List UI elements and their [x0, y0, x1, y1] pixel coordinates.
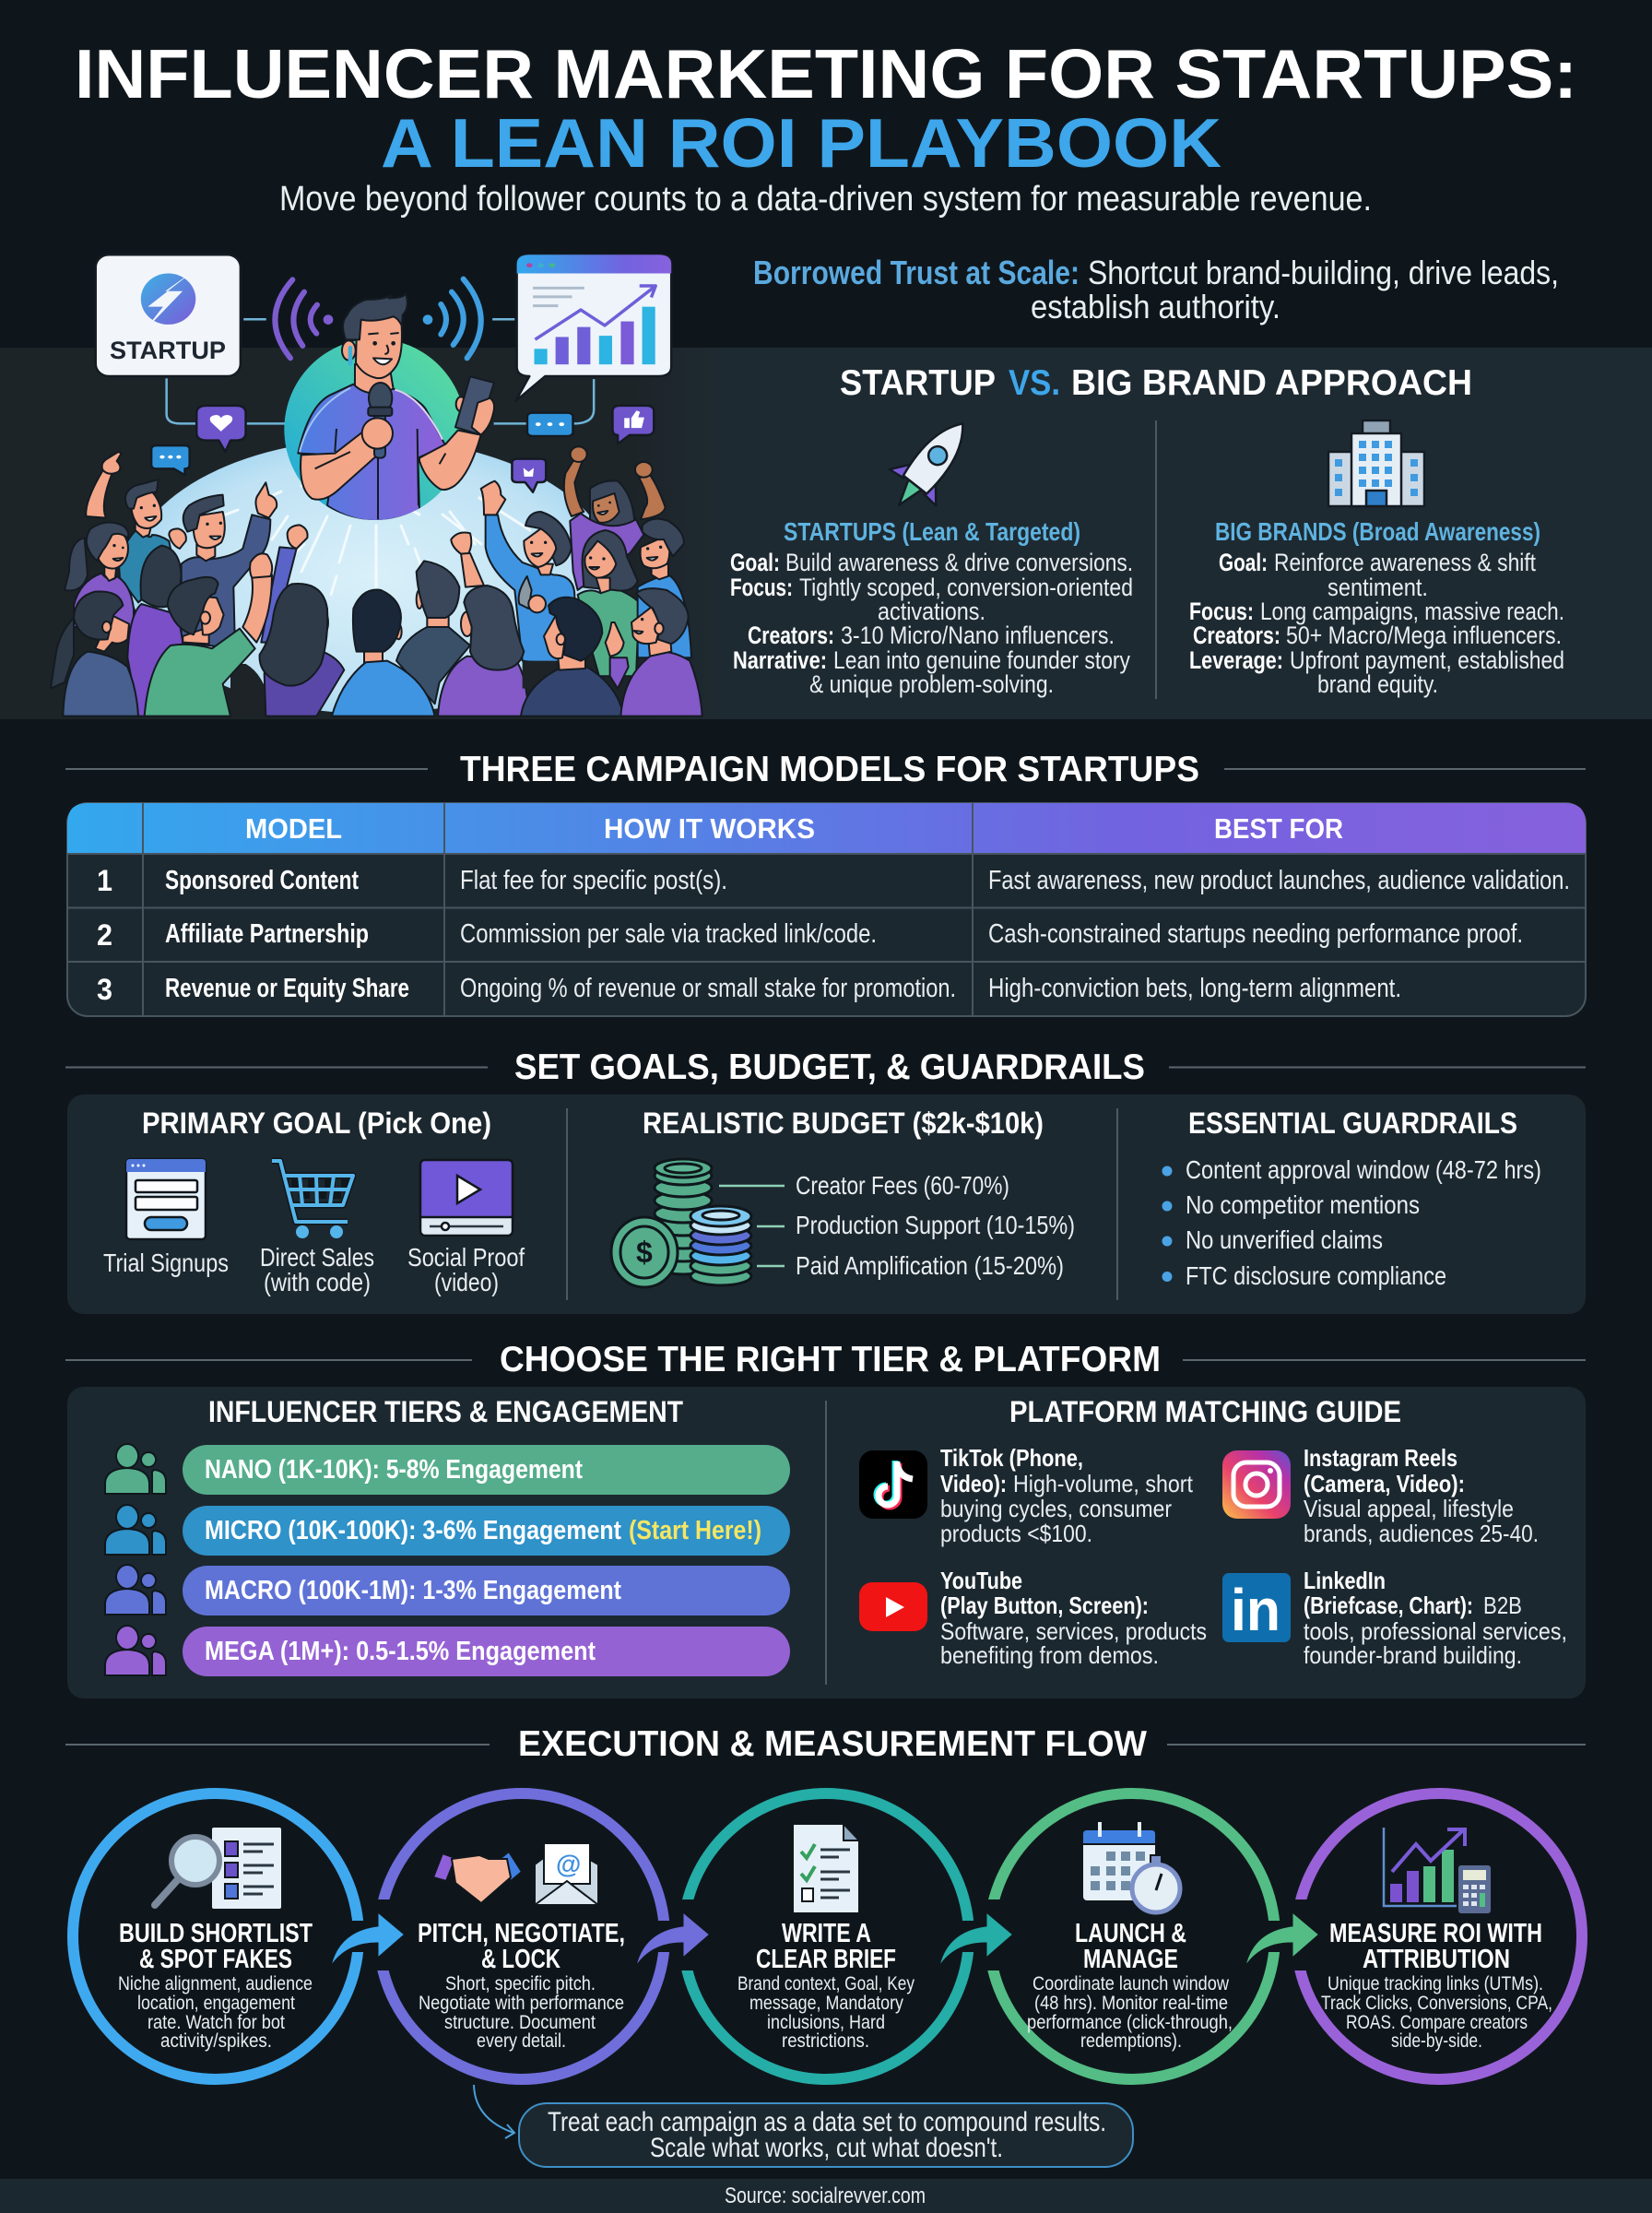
- platform: linkedin: [1222, 1567, 1567, 1669]
- table row 2: [97, 918, 1523, 952]
- table row 1: Sponsored Content: [165, 866, 359, 895]
- step 4: [1027, 1822, 1233, 2052]
- ring 2: [379, 1793, 665, 2079]
- panel: startups column: Narrative:: [733, 646, 827, 674]
- panel: startups column: STARTUPS (Lean & Targeted): [784, 517, 1080, 546]
- step 2: structure. Document: [444, 2012, 596, 2033]
- icon: shopping cart: [272, 1161, 353, 1238]
- panel: big brands column: Focus:: [1189, 598, 1254, 625]
- icon: rocket: [876, 406, 985, 523]
- influencer tiers: [105, 1395, 790, 1676]
- budget column: Production Support (10-15%): [796, 1211, 1075, 1239]
- step 1: BUILD SHORTLIST: [119, 1919, 313, 1948]
- platform: linkedin: in: [1231, 1577, 1280, 1643]
- heading: goals budget guardrails: SET GOALS, BUDGET, & GUARDRAILS: [514, 1047, 1145, 1087]
- callout: Treat each campaign as a data set to compound results.: [548, 2107, 1106, 2137]
- table row 3: Revenue or Equity Share: [165, 974, 409, 1003]
- arrow: feedback connector: [474, 2085, 514, 2138]
- table row 1: 1: [97, 864, 112, 897]
- budget column: [611, 1106, 1075, 1287]
- platform guide: [859, 1395, 1567, 1669]
- text: borrowed trust: Shortcut brand-building, drive leads,: [1088, 254, 1559, 291]
- panel: startups column: Goal:: [730, 549, 780, 576]
- band: hero and comparison background: [0, 348, 1652, 719]
- table row 2: Cash-constrained startups needing performance proof.: [988, 919, 1523, 949]
- primary goal column: PRIMARY GOAL (Pick One): [142, 1106, 491, 1140]
- platform: tiktok: High-volume, short: [1013, 1470, 1194, 1497]
- arrow 1: [329, 1911, 406, 1970]
- step 4: redemptions).: [1080, 2030, 1182, 2052]
- step 3: inclusions, Hard: [767, 2012, 885, 2033]
- spotlight dome: [128, 439, 615, 714]
- connector lines: [167, 319, 594, 423]
- panel: big brands column: brand equity.: [1317, 670, 1438, 698]
- platform: instagram: [1222, 1444, 1539, 1547]
- icon: growth chart and calculator: [1384, 1828, 1492, 1914]
- icon: magnifier and list: [155, 1827, 282, 1910]
- step 3: [738, 1824, 914, 2052]
- subtitle: Move beyond follower counts to a data-driven system for measurable revenue.: [279, 180, 1372, 219]
- budget column: Paid Amplification (15-20%): [796, 1251, 1064, 1280]
- footer source: Source: socialrevver.com: [725, 2183, 926, 2208]
- panel: big brands column: Upfront payment, established: [1290, 646, 1564, 674]
- hero illustration: STARTUP: [110, 337, 226, 364]
- step 1: rate. Watch for bot: [148, 2012, 285, 2033]
- panel: startups column: activations.: [878, 598, 985, 625]
- step 2: Short, specific pitch.: [445, 1973, 596, 1994]
- panel: big brands column: sentiment.: [1328, 574, 1428, 601]
- primary goal column: (video): [434, 1268, 499, 1296]
- tier: macro: MACRO (100K-1M): 1-3% Engagement: [205, 1576, 621, 1605]
- step 5: ATTRIBUTION: [1363, 1945, 1510, 1974]
- ring 5: [1296, 1793, 1582, 2079]
- ring 4: [989, 1793, 1275, 2079]
- heading: execution flow: EXECUTION & MEASUREMENT FLOW: [518, 1724, 1147, 1764]
- platform: instagram: Instagram Reels: [1304, 1444, 1457, 1472]
- step 4: (48 hrs). Monitor real-time: [1034, 1993, 1228, 2014]
- platform: youtube: benefiting from demos.: [940, 1641, 1159, 1669]
- panel: startups column: Creators:: [748, 621, 834, 649]
- platform: youtube: (Play Button, Screen):: [940, 1592, 1149, 1619]
- table header: [245, 812, 1343, 845]
- step 2: Negotiate with performance: [419, 1993, 624, 2014]
- icon: coin stacks: [611, 1159, 751, 1287]
- guardrails column: Content approval window (48-72 hrs): [1186, 1155, 1541, 1184]
- platform: instagram: brands, audiences 25-40.: [1304, 1520, 1539, 1547]
- step 5: side-by-side.: [1391, 2030, 1482, 2052]
- table row 2: 2: [97, 918, 112, 952]
- tier: mega: [105, 1626, 790, 1676]
- step 1: [118, 1827, 313, 2052]
- table row 3: Ongoing % of revenue or small stake for promotion.: [460, 974, 956, 1003]
- icon: signup form: [126, 1159, 206, 1239]
- panel: startups column: Focus:: [730, 574, 793, 601]
- table row 3: 3: [97, 973, 112, 1006]
- card: chart: [515, 254, 671, 401]
- panel: big brands column: Leverage:: [1189, 646, 1283, 674]
- reaction bubbles and cards: [96, 254, 671, 492]
- primary goal column: [103, 1106, 525, 1296]
- table row 1: Flat fee for specific post(s).: [460, 866, 727, 895]
- title: INFLUENCER MARKETING FOR STARTUPS:: [75, 35, 1577, 112]
- step 2: [418, 1843, 625, 2052]
- step 4: LAUNCH &: [1075, 1919, 1186, 1948]
- step 5: Unique tracking links (UTMs).: [1328, 1973, 1543, 1994]
- heading: startup vs big brand: BIG BRAND APPROACH: [1071, 363, 1472, 403]
- guardrails column: ESSENTIAL GUARDRAILS: [1188, 1106, 1517, 1140]
- panel: startups column: Build awareness & drive conversions.: [785, 549, 1133, 576]
- tier: macro: [105, 1565, 790, 1615]
- panel: startups column: Tightly scoped, conversion-oriented: [799, 574, 1133, 601]
- platform: linkedin: (Briefcase, Chart):: [1304, 1592, 1473, 1619]
- icon: handshake and envelope: @: [556, 1850, 581, 1878]
- panel: startups column: 3-10 Micro/Nano influencers.: [841, 621, 1115, 649]
- icon: checklist document: [793, 1824, 859, 1913]
- flow: execution steps: [73, 1793, 1582, 2079]
- ring 3: [683, 1793, 969, 2079]
- panel: goals, budget, guardrails: [67, 1095, 1586, 1314]
- panel: big brands column: Creators:: [1193, 621, 1280, 649]
- tier: nano: NANO (1K-10K): 5-8% Engagement: [205, 1455, 583, 1485]
- table header: MODEL: [245, 812, 342, 845]
- budget column: $: [636, 1236, 653, 1269]
- tier: micro: [105, 1505, 790, 1556]
- icon: video: [420, 1160, 513, 1236]
- tier: nano: [105, 1444, 790, 1495]
- step 4: performance (click-through,: [1027, 2012, 1233, 2033]
- step 3: Brand context, Goal, Key: [738, 1973, 914, 1994]
- step 1: activity/spikes.: [160, 2030, 272, 2052]
- table row 2: Affiliate Partnership: [165, 919, 369, 949]
- tier: micro: MICRO (10K-100K): 3-6% Engagement: [205, 1516, 621, 1545]
- budget column: Creator Fees (60-70%): [796, 1171, 1009, 1200]
- bubbles: reactions: [151, 406, 654, 492]
- panel: startups column: [730, 406, 1133, 698]
- platform: tiktok: products <$100.: [940, 1520, 1092, 1547]
- platform: linkedin: tools, professional services,: [1304, 1617, 1567, 1645]
- panel: big brands column: Goal:: [1219, 549, 1268, 576]
- panel: tiers and platforms: [67, 1387, 1586, 1698]
- band: footer background: [0, 2179, 1652, 2213]
- platform: tiktok: TikTok (Phone,: [940, 1444, 1083, 1472]
- tier: mega: MEGA (1M+): 0.5-1.5% Engagement: [205, 1637, 596, 1666]
- callout: [519, 2103, 1133, 2167]
- heading: startup vs big brand: [840, 363, 1472, 403]
- platform: youtube: YouTube: [940, 1567, 1022, 1594]
- primary goal column: Direct Sales: [260, 1243, 374, 1272]
- tier: micro: (Start Here!): [629, 1516, 761, 1545]
- icon: handshake and envelope: [433, 1843, 598, 1905]
- platform: linkedin: LinkedIn: [1304, 1567, 1386, 1594]
- primary goal column: (with code): [264, 1268, 371, 1296]
- text: borrowed trust: establish authority.: [1031, 288, 1280, 325]
- panel: big brands column: [1189, 420, 1564, 698]
- step 3: WRITE A: [782, 1919, 871, 1948]
- platform: linkedin: founder-brand building.: [1304, 1641, 1522, 1669]
- step 3: restrictions.: [782, 2030, 869, 2052]
- step 4: MANAGE: [1083, 1945, 1178, 1974]
- audience right: [332, 446, 702, 716]
- budget column: REALISTIC BUDGET ($2k-$10k): [643, 1106, 1044, 1140]
- platform: linkedin: B2B: [1483, 1592, 1522, 1619]
- title: [75, 35, 1577, 182]
- platform guide: PLATFORM MATCHING GUIDE: [1009, 1395, 1401, 1428]
- primary goal column: Trial Signups: [103, 1249, 229, 1277]
- table header: BEST FOR: [1214, 812, 1343, 845]
- text: borrowed trust: Borrowed Trust at Scale:: [753, 254, 1080, 291]
- platform: tiktok: buying cycles, consumer: [940, 1495, 1172, 1522]
- platform: youtube: [859, 1567, 1207, 1669]
- card: startup logo: [96, 254, 241, 376]
- step 2: PITCH, NEGOTIATE,: [418, 1919, 625, 1948]
- icon: building: [1328, 420, 1424, 506]
- arrow 2: [634, 1911, 711, 1970]
- panel: big brands column: BIG BRANDS (Broad Awareness): [1215, 517, 1540, 546]
- guardrails column: No unverified claims: [1186, 1225, 1383, 1254]
- heading: three campaign models: THREE CAMPAIGN MODELS FOR STARTUPS: [460, 750, 1199, 789]
- step 3: CLEAR BRIEF: [756, 1945, 896, 1974]
- guardrails column: FTC disclosure compliance: [1186, 1261, 1446, 1290]
- table header: HOW IT WORKS: [604, 812, 815, 845]
- step 5: MEASURE ROI WITH: [1329, 1919, 1542, 1948]
- platform: youtube: Software, services, products: [940, 1617, 1207, 1645]
- influencer tiers: INFLUENCER TIERS & ENGAGEMENT: [208, 1395, 683, 1428]
- panel: big brands column: 50+ Macro/Mega influencers.: [1286, 621, 1562, 649]
- panel: startups column: & unique problem-solving.: [809, 670, 1054, 698]
- text: borrowed trust: [753, 254, 1559, 325]
- panel: big brands column: Reinforce awareness & shift: [1274, 549, 1536, 576]
- table row 3: High-conviction bets, long-term alignment.: [988, 974, 1401, 1003]
- step 5: Track Clicks, Conversions, CPA,: [1321, 1993, 1552, 2014]
- step 1: location, engagement: [137, 1993, 295, 2014]
- platform: instagram: Visual appeal, lifestyle: [1304, 1495, 1514, 1522]
- signal waves: [275, 279, 481, 358]
- table: campaign models: [67, 803, 1586, 1016]
- callout: Scale what works, cut what doesn't.: [650, 2133, 1003, 2163]
- heading: startup vs big brand: STARTUP: [840, 363, 996, 403]
- table row 1: [97, 864, 1570, 897]
- platform: tiktok: [859, 1444, 1194, 1547]
- table row 3: [97, 973, 1401, 1006]
- primary goal column: Social Proof: [407, 1243, 525, 1272]
- step 3: message, Mandatory: [749, 1993, 903, 2014]
- step 5: [1321, 1828, 1552, 2052]
- speaker: [284, 293, 494, 521]
- arrow 3: [938, 1911, 1014, 1970]
- step 2: every detail.: [477, 2030, 566, 2052]
- step 2: & LOCK: [481, 1945, 560, 1974]
- guardrails column: No competitor mentions: [1186, 1190, 1420, 1219]
- step 4: Coordinate launch window: [1032, 1973, 1230, 1994]
- arrow 4: [1244, 1911, 1320, 1970]
- hero illustration: [51, 254, 702, 716]
- table row 2: Commission per sale via tracked link/code.: [460, 919, 877, 949]
- panel: big brands column: Long campaigns, massive reach.: [1260, 598, 1564, 625]
- audience left: [51, 452, 344, 716]
- platform: instagram: (Camera, Video):: [1304, 1470, 1465, 1497]
- platform: tiktok: Video):: [940, 1470, 1007, 1497]
- guardrails column: [1162, 1106, 1541, 1290]
- step 1: & SPOT FAKES: [139, 1945, 292, 1974]
- heading: startup vs big brand: VS.: [1009, 363, 1060, 403]
- step 1: Niche alignment, audience: [118, 1973, 313, 1994]
- title: A LEAN ROI PLAYBOOK: [381, 104, 1221, 182]
- heading: tier and platform: CHOOSE THE RIGHT TIER & PLATFORM: [500, 1340, 1161, 1379]
- step 5: ROAS. Compare creators: [1346, 2012, 1528, 2033]
- ring 1: [73, 1793, 359, 2079]
- icon: calendar and stopwatch: [1082, 1822, 1180, 1912]
- panel: startups column: Lean into genuine founder story: [833, 646, 1130, 674]
